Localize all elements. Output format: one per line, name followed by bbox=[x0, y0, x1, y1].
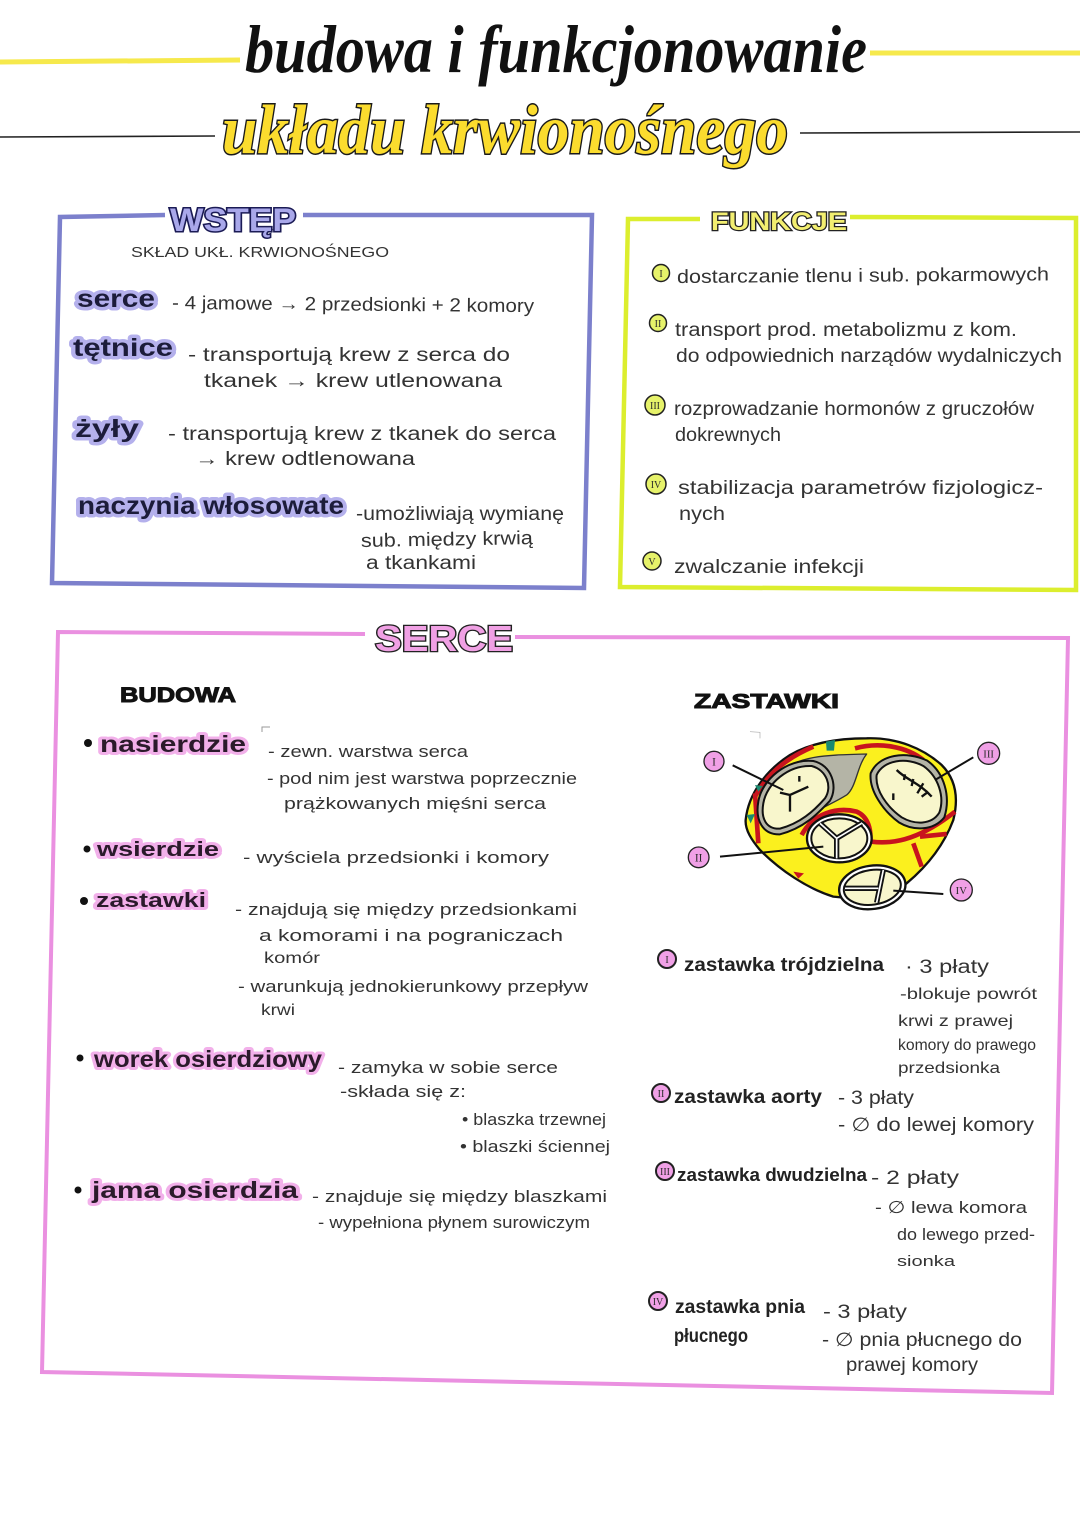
subheading: SKŁAD UKŁ. KRWIONOŚNEGO bbox=[131, 243, 389, 261]
function 5: V bbox=[648, 557, 656, 568]
heading: funkcje: FUNKCJE bbox=[711, 208, 847, 236]
item: worek osierdziowy: • blaszka trzewnej bbox=[462, 1110, 606, 1129]
valve: trójdzielna: komory do prawego bbox=[898, 1037, 1036, 1054]
valve: trójdzielna: -blokuje powrót bbox=[900, 986, 1038, 1003]
diagram: heart valves: I bbox=[712, 756, 716, 768]
valve: dwudzielna: zastawka dwudzielna bbox=[677, 1165, 868, 1185]
term: żyły: - transportują krew z tkanek do serca bbox=[168, 424, 557, 445]
title bbox=[0, 11, 1080, 169]
heading: serce: SERCE bbox=[375, 618, 513, 659]
item: nasierdzie bbox=[84, 727, 577, 813]
valve: aorty bbox=[652, 1084, 1035, 1136]
valve: dwudzielna: - ∅ lewa komora bbox=[875, 1198, 1028, 1217]
panel: funkcje bbox=[620, 208, 1076, 590]
item: jama osierdzia: - wypełniona płynem surowiczym bbox=[318, 1213, 590, 1232]
function 2: do odpowiednich narządów wydalniczych bbox=[676, 346, 1062, 367]
term: tętnice: tkanek → krew utlenowana bbox=[204, 371, 503, 392]
item: worek osierdziowy bbox=[76, 1046, 610, 1156]
term: naczynia włosowate: sub. między krwią bbox=[361, 528, 534, 552]
valve: trójdzielna bbox=[658, 950, 1038, 1077]
term: naczynia włosowate: a tkankami bbox=[366, 553, 476, 574]
valve: dwudzielna: do lewego przed- bbox=[897, 1225, 1035, 1244]
function 3: III bbox=[650, 401, 660, 412]
item: worek osierdziowy: worek osierdziowy bbox=[93, 1046, 322, 1072]
item: nasierdzie: nasierdzie bbox=[100, 731, 246, 757]
valve: dwudzielna: sionka bbox=[897, 1253, 956, 1270]
item: wsierdzie bbox=[84, 839, 550, 867]
item: wsierdzie: - wyściela przedsionki i komory bbox=[243, 848, 550, 867]
diagram: heart valves: IV bbox=[956, 886, 967, 897]
valve: dwudzielna: III bbox=[660, 1167, 670, 1178]
function 4: nych bbox=[679, 504, 725, 525]
term: tętnice: tętnice bbox=[73, 334, 173, 362]
item: nasierdzie: prążkowanych mięśni serca bbox=[284, 794, 547, 813]
term: serce: - 4 jamowe → 2 przedsionki + 2 komory bbox=[172, 293, 535, 317]
function 4: stabilizacja parametrów fizjologicz- bbox=[678, 478, 1043, 499]
item: zastawki bbox=[80, 890, 589, 1019]
valve: trójdzielna: zastawka trójdzielna bbox=[684, 955, 884, 976]
item: worek osierdziowy: - zamyka w sobie serce bbox=[338, 1058, 558, 1077]
function 2: II bbox=[655, 319, 661, 330]
function 1: dostarczanie tlenu i sub. pokarmowych bbox=[677, 264, 1049, 288]
term: tętnice: - transportują krew z serca do bbox=[188, 345, 510, 366]
item: zastawki: zastawki bbox=[96, 890, 206, 912]
valve: pnia płucnego bbox=[649, 1292, 1022, 1376]
valve: dwudzielna bbox=[656, 1162, 1035, 1270]
valve: pnia płucnego: - ∅ pnia płucnego do bbox=[822, 1330, 1022, 1351]
valve: trójdzielna: krwi z prawej bbox=[898, 1013, 1013, 1030]
title line 2: układu krwionośnego bbox=[222, 92, 788, 169]
term: naczynia włosowate bbox=[78, 492, 564, 574]
valve: trójdzielna: I bbox=[665, 955, 669, 966]
valve: trójdzielna: przedsionka bbox=[898, 1060, 1000, 1077]
item: jama osierdzia: - znajduje się między blaszkami bbox=[312, 1187, 607, 1206]
valve: aorty: - 3 płaty bbox=[838, 1088, 915, 1109]
item: jama osierdzia bbox=[74, 1177, 607, 1232]
diagram: heart valves: III bbox=[983, 749, 994, 760]
function 3: rozprowadzanie hormonów z gruczołów bbox=[674, 399, 1034, 420]
heading: zastawki: ZASTAWKI bbox=[694, 691, 839, 713]
title line 1: budowa i funkcjonowanie bbox=[245, 11, 867, 87]
term: naczynia włosowate: naczynia włosowate bbox=[78, 492, 344, 520]
function 2: transport prod. metabolizmu z kom. bbox=[675, 320, 1017, 341]
heading: wstęp: WSTĘP bbox=[170, 202, 296, 238]
item: worek osierdziowy: • blaszki ściennej bbox=[460, 1137, 610, 1156]
diagram: heart valves: II bbox=[695, 852, 703, 864]
panel: serce bbox=[42, 618, 1068, 1393]
valve: pnia płucnego: płucnego bbox=[674, 1326, 748, 1347]
item: nasierdzie: - zewn. warstwa serca bbox=[268, 742, 469, 761]
item: zastawki: a komorami i na pograniczach bbox=[259, 926, 563, 945]
diagram: heart valves bbox=[688, 732, 1000, 913]
function 3 bbox=[645, 395, 1034, 446]
valve: trójdzielna: · 3 płaty bbox=[905, 957, 990, 978]
item: zastawki: krwi bbox=[261, 1002, 295, 1019]
valve: pnia płucnego: prawej komory bbox=[846, 1355, 979, 1376]
valve: dwudzielna: - 2 płaty bbox=[871, 1168, 960, 1189]
term: naczynia włosowate: -umożliwiają wymianę bbox=[356, 504, 564, 525]
item: jama osierdzia: jama osierdzia bbox=[91, 1177, 298, 1203]
item: worek osierdziowy: -składa się z: bbox=[340, 1082, 466, 1101]
function 5 bbox=[643, 552, 864, 578]
panel: wstęp bbox=[52, 202, 592, 588]
term: żyły: żyły bbox=[75, 415, 139, 443]
column: zastawki bbox=[649, 691, 1038, 1376]
term: żyły: → krew odtlenowana bbox=[195, 449, 416, 470]
valve: pnia płucnego: IV bbox=[653, 1297, 664, 1308]
function 1: I bbox=[659, 269, 663, 280]
valve: pnia płucnego: zastawka pnia bbox=[675, 1297, 805, 1318]
item: zastawki: - znajdują się między przedsionkami bbox=[235, 900, 577, 919]
valve: aorty: zastawka aorty bbox=[674, 1087, 822, 1108]
column: budowa bbox=[74, 684, 610, 1232]
heading: budowa: BUDOWA bbox=[120, 684, 236, 707]
function 2 bbox=[650, 314, 1062, 367]
item: nasierdzie: - pod nim jest warstwa poprzecznie bbox=[267, 769, 577, 788]
function 4 bbox=[646, 474, 1043, 525]
item: zastawki: - warunkują jednokierunkowy przepływ bbox=[238, 977, 589, 996]
function 3: dokrewnych bbox=[675, 425, 781, 446]
valve: aorty: - ∅ do lewej komory bbox=[838, 1115, 1035, 1136]
term: żyły bbox=[75, 415, 557, 470]
valve: aorty: II bbox=[658, 1089, 664, 1100]
term: tętnice bbox=[73, 334, 510, 392]
function 5: zwalczanie infekcji bbox=[674, 557, 864, 578]
term: serce bbox=[77, 285, 535, 317]
item: wsierdzie: wsierdzie bbox=[96, 839, 219, 861]
term: serce: serce bbox=[77, 285, 155, 313]
function 4: IV bbox=[651, 480, 662, 491]
valve: pnia płucnego: - 3 płaty bbox=[823, 1302, 908, 1323]
item: zastawki: komór bbox=[264, 950, 321, 967]
